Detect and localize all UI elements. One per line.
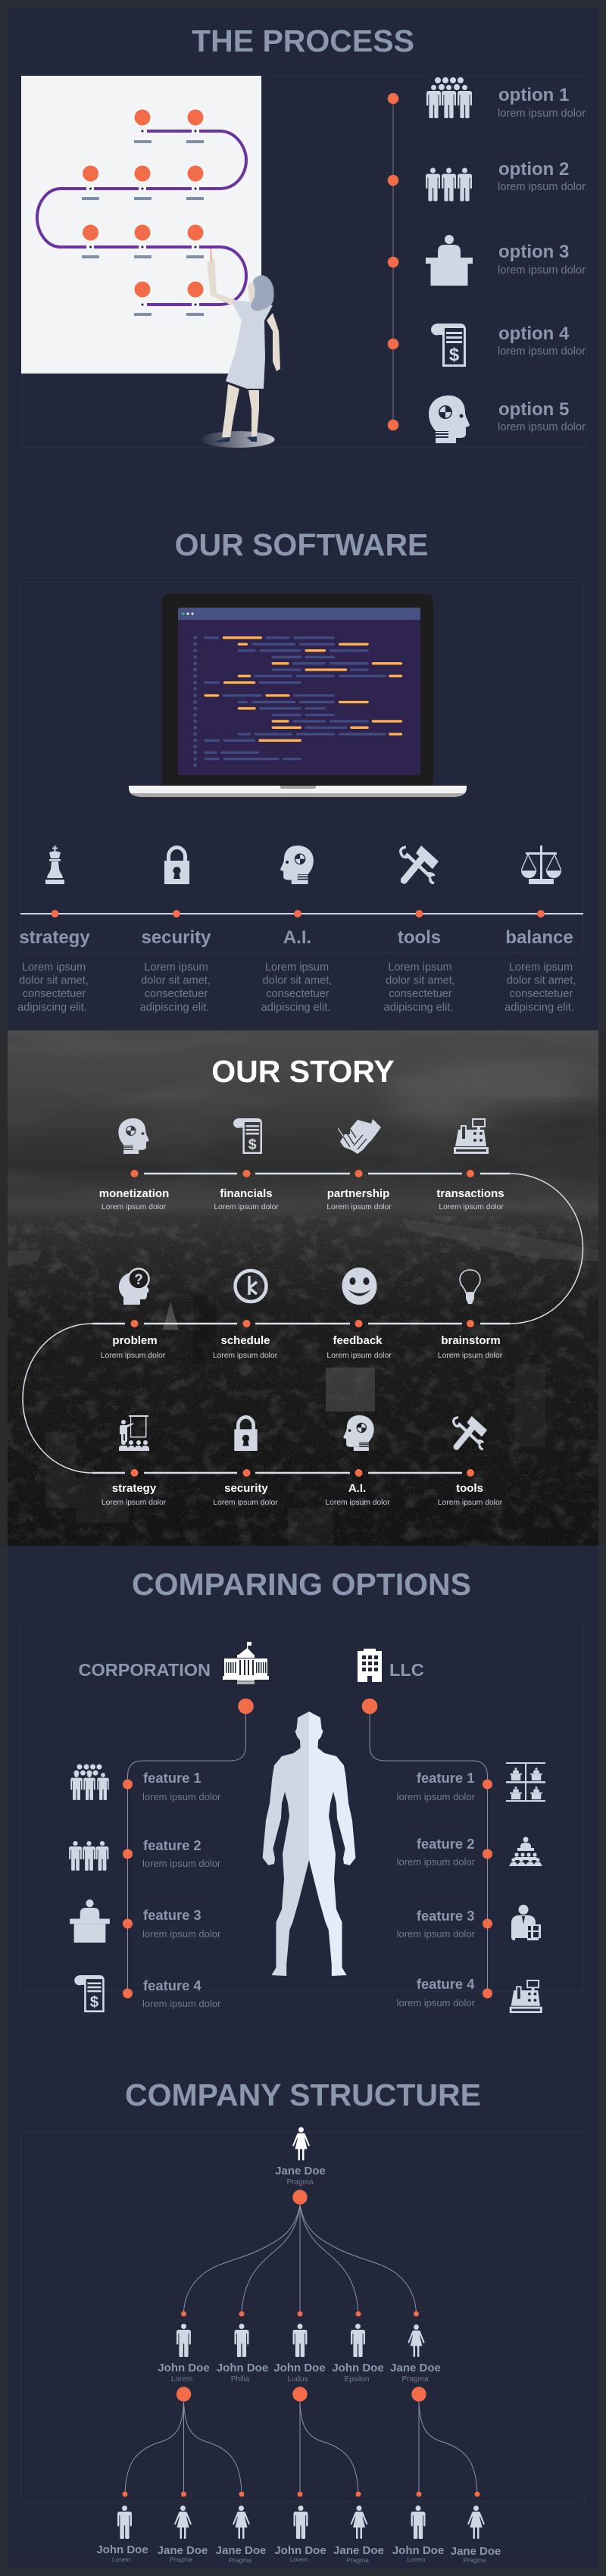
timeline: software (20, 910, 583, 918)
people: level three (117, 2506, 485, 2539)
column: ai: dolor sit amet, (263, 974, 332, 986)
title: company structure: COMPANY STRUCTURE (125, 2077, 481, 2112)
names: level two: Ludus (287, 2375, 308, 2384)
icon: tools (454, 1416, 487, 1450)
icon: padlock (164, 847, 189, 884)
labels: row two: schedule (220, 1334, 270, 1347)
frame: company structure (21, 2132, 585, 2502)
names: level two: Jane Doe (390, 2362, 441, 2374)
illustration: human figure (263, 1712, 355, 1976)
icon: cash register (510, 1980, 542, 2013)
whiteboard roadmap (21, 76, 261, 374)
names: level two: John Doe (217, 2362, 268, 2374)
names: level three (96, 2543, 501, 2564)
icon: brainstorm bulb (460, 1270, 480, 1304)
icon: office floors (506, 1762, 545, 1802)
text: option 5 (498, 399, 586, 433)
column: security: security (141, 927, 211, 948)
top person: jane doe (275, 2127, 326, 2187)
column: balance: consectetuer (510, 988, 573, 1000)
top person: jane doe: Pragma (286, 2178, 314, 2187)
text: right features: feature 3 (417, 1908, 474, 1924)
icon: feedback smile (342, 1268, 377, 1305)
photo background: city skyline (0, 1030, 606, 1546)
icon: ai head (280, 846, 314, 884)
names: level two: John Doe (332, 2362, 384, 2374)
icon: capitol building (223, 1642, 269, 1684)
labels: row one: transactions (436, 1187, 504, 1200)
column: balance: adipiscing elit. (504, 1002, 574, 1014)
text: right features: feature 2 (417, 1836, 474, 1852)
labels: row three: Lorem ipsum dolor (325, 1499, 390, 1507)
labels: row two: Lorem ipsum dolor (326, 1352, 392, 1360)
icon: crowd (426, 77, 472, 118)
text: right features: lorem ipsum dolor (397, 1928, 476, 1940)
labels: row three (102, 1482, 503, 1507)
connector dots (123, 1699, 492, 1999)
icon: transactions register (454, 1118, 489, 1154)
labels: row three: Lorem ipsum dolor (438, 1499, 503, 1507)
path dots (130, 1170, 474, 1477)
labels: row three: Lorem ipsum dolor (102, 1499, 167, 1507)
labels: row two: problem (112, 1334, 158, 1347)
connectors: level one (183, 2205, 417, 2314)
labels: row two: Lorem ipsum dolor (101, 1352, 166, 1360)
column: security (140, 927, 211, 1014)
names: level three: John Doe (274, 2544, 326, 2557)
icon: speaker podium (70, 1899, 110, 1943)
column: strategy: Lorem ipsum (22, 961, 86, 974)
names: level three: Jane Doe (333, 2544, 384, 2557)
column: ai: A.I. (283, 927, 311, 948)
icon: three people (426, 168, 472, 202)
icon: financials receipt (233, 1118, 262, 1154)
text: option 2 (498, 159, 586, 193)
text: option 2: lorem ipsum dolor (498, 181, 586, 193)
frame: comparing options (20, 1621, 583, 1991)
column: security: consectetuer (145, 988, 208, 1000)
section: company structure (21, 2077, 585, 2564)
labels: row one: Lorem ipsum dolor (326, 1203, 392, 1211)
section: comparing options (20, 1567, 583, 2013)
text: right features (397, 1770, 476, 2009)
labels: row one (99, 1187, 504, 1211)
icon: three people (69, 1841, 108, 1871)
labels: row two: Lorem ipsum dolor (438, 1352, 503, 1360)
icon: balance scales (521, 846, 561, 884)
title: our software: OUR SOFTWARE (175, 527, 428, 562)
names: level three: John Doe (96, 2543, 148, 2556)
text: left features: lorem ipsum dolor (142, 1791, 221, 1802)
column: tools: consectetuer (389, 988, 452, 1000)
icon: office tower (358, 1649, 382, 1682)
column: strategy: dolor sit amet, (19, 974, 89, 986)
labels: row three: security (224, 1482, 268, 1495)
icon: monetization head (118, 1118, 149, 1154)
column: tools: adipiscing elit. (384, 1002, 453, 1014)
connector lines (127, 1714, 488, 1993)
column: strategy (17, 927, 90, 1014)
nodes: level one (181, 2190, 419, 2317)
names: level three: Pragma (346, 2556, 369, 2564)
column: balance: Lorem ipsum (509, 961, 573, 974)
section: the process (21, 23, 586, 448)
names: level three: Pragma (170, 2556, 192, 2563)
text: option 1: option 1 (498, 85, 569, 105)
heading: corporation: CORPORATION (79, 1660, 211, 1680)
winding path (23, 1174, 583, 1473)
labels: row one: monetization (99, 1187, 169, 1200)
labels: row three: tools (456, 1482, 483, 1495)
names: level two: Lorem (171, 2375, 192, 2384)
text: left features: lorem ipsum dolor (142, 1858, 221, 1869)
names: level three: John Doe (392, 2544, 444, 2557)
frame: the process (22, 77, 586, 447)
text: option 2: option 2 (498, 159, 569, 180)
column: strategy: consectetuer (23, 988, 86, 1000)
labels: row one: Lorem ipsum dolor (102, 1203, 167, 1211)
column: ai: consectetuer (266, 988, 330, 1000)
names: level two: John Doe (158, 2362, 210, 2374)
text: left features: feature 4 (143, 1977, 201, 1993)
labels: row three: Lorem ipsum dolor (213, 1499, 278, 1507)
icon: tools (401, 846, 439, 884)
text: right features: lorem ipsum dolor (397, 1997, 476, 2009)
icon: schedule clock (235, 1271, 267, 1302)
connectors: level two (125, 2402, 477, 2494)
section: our story (0, 1030, 606, 1546)
text: option 1 (498, 85, 586, 120)
names: level three: Lorem (112, 2556, 130, 2563)
column: security: dolor sit amet, (141, 974, 211, 986)
names: level three: Pragma (464, 2556, 486, 2564)
names: level three: Jane Doe (216, 2544, 266, 2557)
names: level three: Lorem (407, 2556, 426, 2563)
timeline: options (388, 93, 398, 430)
icon: crowd (70, 1764, 109, 1800)
names: level two: Epsilon (345, 2375, 369, 2384)
column: tools (384, 927, 455, 1014)
column: security: Lorem ipsum (144, 961, 208, 974)
text: option 1: lorem ipsum dolor (498, 108, 586, 120)
icon: strategy presenter (119, 1415, 149, 1451)
labels: row one: financials (220, 1187, 273, 1200)
column: ai: Lorem ipsum (265, 961, 329, 974)
column: ai: adipiscing elit. (261, 1002, 330, 1014)
column: tools: tools (398, 927, 441, 948)
text: option 3 (498, 242, 586, 277)
labels: row two: feedback (333, 1334, 383, 1347)
labels: row three: strategy (112, 1482, 157, 1495)
column: tools: dolor sit amet, (386, 974, 455, 986)
column: strategy: adipiscing elit. (17, 1002, 87, 1014)
text: right features: feature 1 (417, 1770, 474, 1786)
text: option 4: option 4 (498, 324, 570, 344)
title: comparing options: COMPARING OPTIONS (132, 1567, 471, 1602)
names: level two: Pragma (401, 2375, 429, 2384)
icon: chess king (45, 846, 64, 884)
text: left features: lorem ipsum dolor (142, 1998, 221, 2009)
text: right features: lorem ipsum dolor (397, 1791, 476, 1802)
text: left features: feature 3 (143, 1907, 201, 1923)
top person: jane doe: Jane Doe (275, 2165, 326, 2177)
names: level two: Philia (231, 2375, 250, 2384)
column: balance: balance (505, 927, 573, 948)
nodes: level two (123, 2387, 480, 2497)
labels: row two: Lorem ipsum dolor (213, 1352, 278, 1360)
labels: row one: Lorem ipsum dolor (439, 1203, 504, 1211)
names: level three: Jane Doe (451, 2545, 501, 2558)
labels: row one: Lorem ipsum dolor (214, 1203, 279, 1211)
column: strategy: strategy (19, 927, 90, 948)
labels: row three: A.I. (348, 1482, 366, 1495)
column: balance: dolor sit amet, (507, 974, 576, 986)
column: security: adipiscing elit. (140, 1002, 209, 1014)
text: left features: lorem ipsum dolor (142, 1928, 221, 1940)
text: left features: feature 2 (143, 1837, 201, 1853)
text: option 3: lorem ipsum dolor (498, 264, 586, 277)
text: option 5: option 5 (498, 399, 569, 420)
laptop with code editor (129, 594, 467, 797)
frame: our software (20, 582, 583, 952)
illustration: woman at whiteboard (201, 249, 280, 448)
icon: problem head (119, 1268, 149, 1305)
column: tools: Lorem ipsum (388, 961, 452, 974)
icon: head (429, 395, 470, 443)
labels: row two: brainstorm (441, 1334, 501, 1347)
text: option 3: option 3 (498, 242, 569, 262)
icon: receipt (431, 324, 466, 367)
text: option 5: lorem ipsum dolor (498, 421, 586, 433)
heading: llc: LLC (389, 1660, 424, 1680)
names: level three: Lorem (290, 2556, 308, 2563)
text: option 4: lorem ipsum dolor (498, 345, 586, 358)
column: balance (504, 927, 576, 1014)
column: ai (261, 927, 332, 1014)
text: right features: lorem ipsum dolor (397, 1856, 476, 1868)
text: right features: feature 4 (417, 1976, 475, 1992)
labels: row two (101, 1334, 503, 1360)
title: our story: OUR STORY (211, 1054, 395, 1089)
names: level two: John Doe (273, 2362, 326, 2374)
icon: partnership handshake (338, 1119, 381, 1154)
icon: speaker at podium (426, 235, 473, 286)
labels: row one: partnership (327, 1187, 389, 1200)
title: the process: THE PROCESS (192, 23, 414, 58)
icon: receipt (74, 1975, 105, 2012)
text: option 4 (498, 324, 586, 358)
icon: ai head (343, 1415, 374, 1451)
names: level three: Jane Doe (158, 2544, 208, 2557)
icon: security lock (234, 1417, 258, 1451)
section: our software (17, 527, 583, 1014)
text: left features: feature 1 (143, 1770, 201, 1786)
names: level two (158, 2362, 441, 2384)
text: left features (142, 1770, 221, 2009)
icon: audience pyramid (509, 1837, 542, 1866)
names: level three: Pragma (229, 2556, 251, 2564)
icon: businessman (511, 1905, 541, 1940)
people: level two (176, 2324, 425, 2357)
